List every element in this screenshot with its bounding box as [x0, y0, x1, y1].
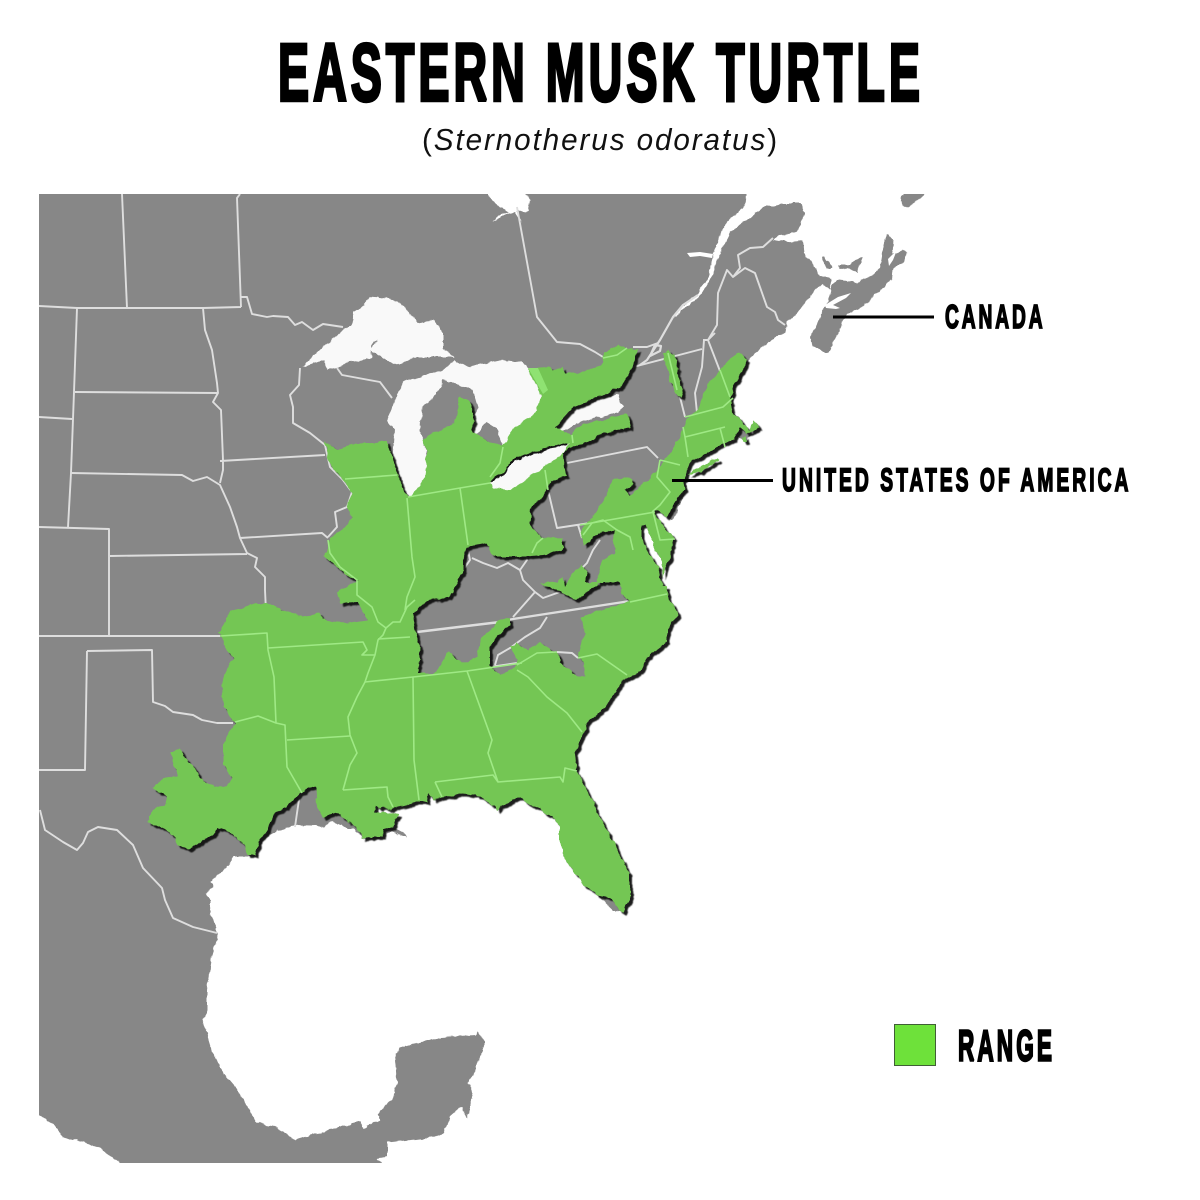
callout: United States of America [672, 462, 1132, 498]
lake: Ontario [557, 395, 623, 432]
callout line: USA [672, 479, 773, 482]
callout line: Canada [833, 316, 934, 318]
label: Canada: CANADA [945, 298, 1046, 335]
callout: Canada [833, 298, 1046, 335]
range: green distribution area with drop shadow [148, 345, 758, 912]
white water: Minas Basin, Bras d'Or, Saguenay [687, 250, 897, 309]
range: lighter patch at Lake Huron shore [528, 368, 548, 394]
lake: Michigan and Huron [387, 360, 543, 497]
legend label: RANGE [958, 1022, 1055, 1070]
map: clipped map area [25, 180, 940, 1175]
map: land mass of eastern North America [25, 180, 940, 1175]
lake: Superior [302, 297, 455, 370]
subtitle: scientific name: (Sternotherus odoratus) [422, 122, 779, 157]
state borders over the range [220, 348, 733, 807]
state and provincial borders on gray land [39, 194, 785, 933]
lake Erie shore shadow [491, 443, 568, 482]
lake: Erie with north-shore shadow, drawn over the range [490, 442, 570, 490]
legend [894, 1022, 1055, 1070]
legend swatch [894, 1024, 936, 1066]
Great Lakes [302, 297, 623, 497]
lake Erie water [490, 442, 570, 490]
